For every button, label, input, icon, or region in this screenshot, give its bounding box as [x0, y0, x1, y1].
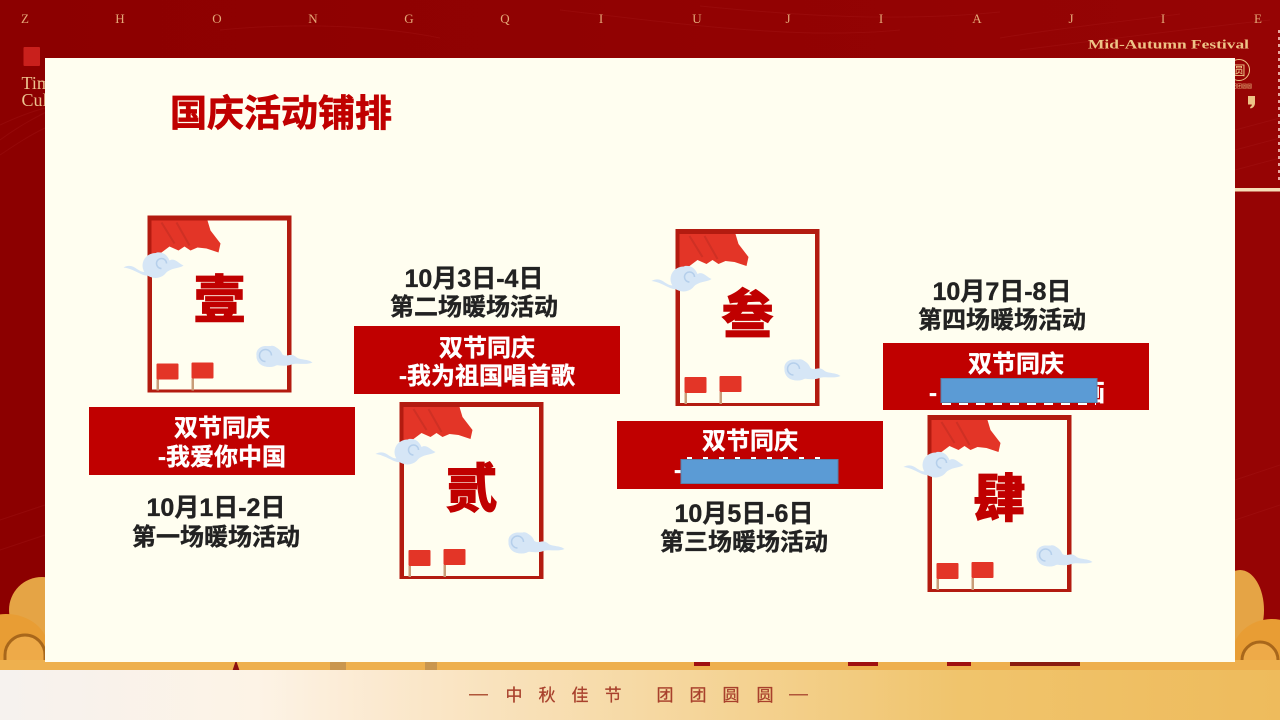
card 2 frame: 贰 [445, 461, 498, 519]
panel: main card [45, 58, 1235, 662]
date block 3 [660, 500, 828, 556]
banner 3: - [674, 457, 682, 484]
top letter row: O [212, 11, 222, 26]
footer strip [0, 670, 1280, 720]
banner 1: 双节同庆 [174, 415, 270, 442]
left caption [22, 73, 76, 110]
title: 国庆活动铺排 [170, 93, 392, 134]
footer slogan [469, 686, 808, 705]
footer slogan: 中 [506, 686, 522, 705]
card 3 frame: 叁 [721, 286, 774, 345]
date block 3: 10月5日-6日 [675, 500, 813, 528]
banner 1 [89, 407, 355, 475]
date block 1 [132, 494, 300, 551]
icon: round seal: 团团圆圆 [1232, 84, 1252, 90]
banner 2: 双节同庆 [439, 335, 535, 362]
footer slogan: 团 [690, 686, 706, 705]
date block 3: 第三场暖场活动 [660, 529, 828, 556]
date block 2: 第二场暖场活动 [390, 294, 558, 321]
date block 2: 10月3日-4日 [405, 265, 543, 293]
card 4 frame: 肆 [973, 471, 1026, 529]
banner 1: -我爱你中国 [158, 444, 286, 471]
icon: red seal [24, 47, 40, 66]
top letter row: I [1161, 11, 1165, 26]
gold clouds left [0, 577, 75, 682]
top letter row: E [1254, 11, 1262, 26]
icon: round seal: 圆 [1232, 63, 1246, 78]
top letter row: H [115, 11, 125, 26]
left caption: Culture [22, 90, 76, 110]
top letter row: J [785, 11, 791, 26]
banner 3: 双节同庆 [702, 428, 798, 455]
top letter row: J [1068, 11, 1074, 26]
card 1 frame [124, 216, 312, 392]
date block 1: 10月1日-2日 [147, 494, 285, 522]
top letter row: A [972, 11, 982, 26]
date block 4: 第四场暖场活动 [918, 307, 1086, 334]
top letter row: N [308, 11, 318, 26]
footer slogan: 团 [656, 686, 674, 705]
footer slogan: 佳 [572, 686, 588, 705]
icon: comma mark [1248, 96, 1255, 108]
banner 4: - [929, 380, 937, 407]
top letter row [21, 11, 1262, 26]
card 2 frame [376, 402, 564, 579]
date block 4: 10月7日-8日 [933, 278, 1071, 306]
footer slogan: 圆 [722, 686, 740, 705]
date block 4 [918, 278, 1086, 334]
card 3 frame [652, 229, 840, 406]
redaction block 3 [681, 460, 838, 484]
date block 1: 第一场暖场活动 [132, 524, 300, 551]
banner 2 [354, 326, 620, 394]
top letter row: U [692, 11, 702, 26]
banner 4: 画 [1081, 380, 1105, 407]
footer slogan: 秋 [538, 686, 556, 705]
date block 2 [390, 265, 558, 321]
banner 4: 双节同庆 [968, 351, 1064, 378]
card 4 frame [904, 415, 1092, 592]
right cream rule [1235, 188, 1280, 192]
top letter row: Q [500, 11, 510, 26]
left caption: Time [22, 73, 59, 93]
English heading: Mid-Autumn Festival [1088, 36, 1250, 52]
right dotted edge [1278, 30, 1280, 180]
footer slogan: 节 [604, 686, 622, 705]
gold base band [0, 660, 1280, 672]
icon: round seal [1228, 60, 1252, 90]
card 1 frame: 壹 [193, 272, 246, 330]
footer slogan: 圆 [756, 686, 774, 705]
gold clouds right [1216, 570, 1280, 691]
top letter row: I [599, 11, 603, 26]
banner 3 [617, 421, 883, 489]
redaction block 4 [941, 378, 1097, 402]
top letter row: I [879, 11, 883, 26]
top letter row: Z [21, 11, 29, 26]
banner 2: -我为祖国唱首歌 [399, 363, 575, 390]
top letter row: G [404, 11, 414, 26]
banner 4 [883, 343, 1149, 410]
